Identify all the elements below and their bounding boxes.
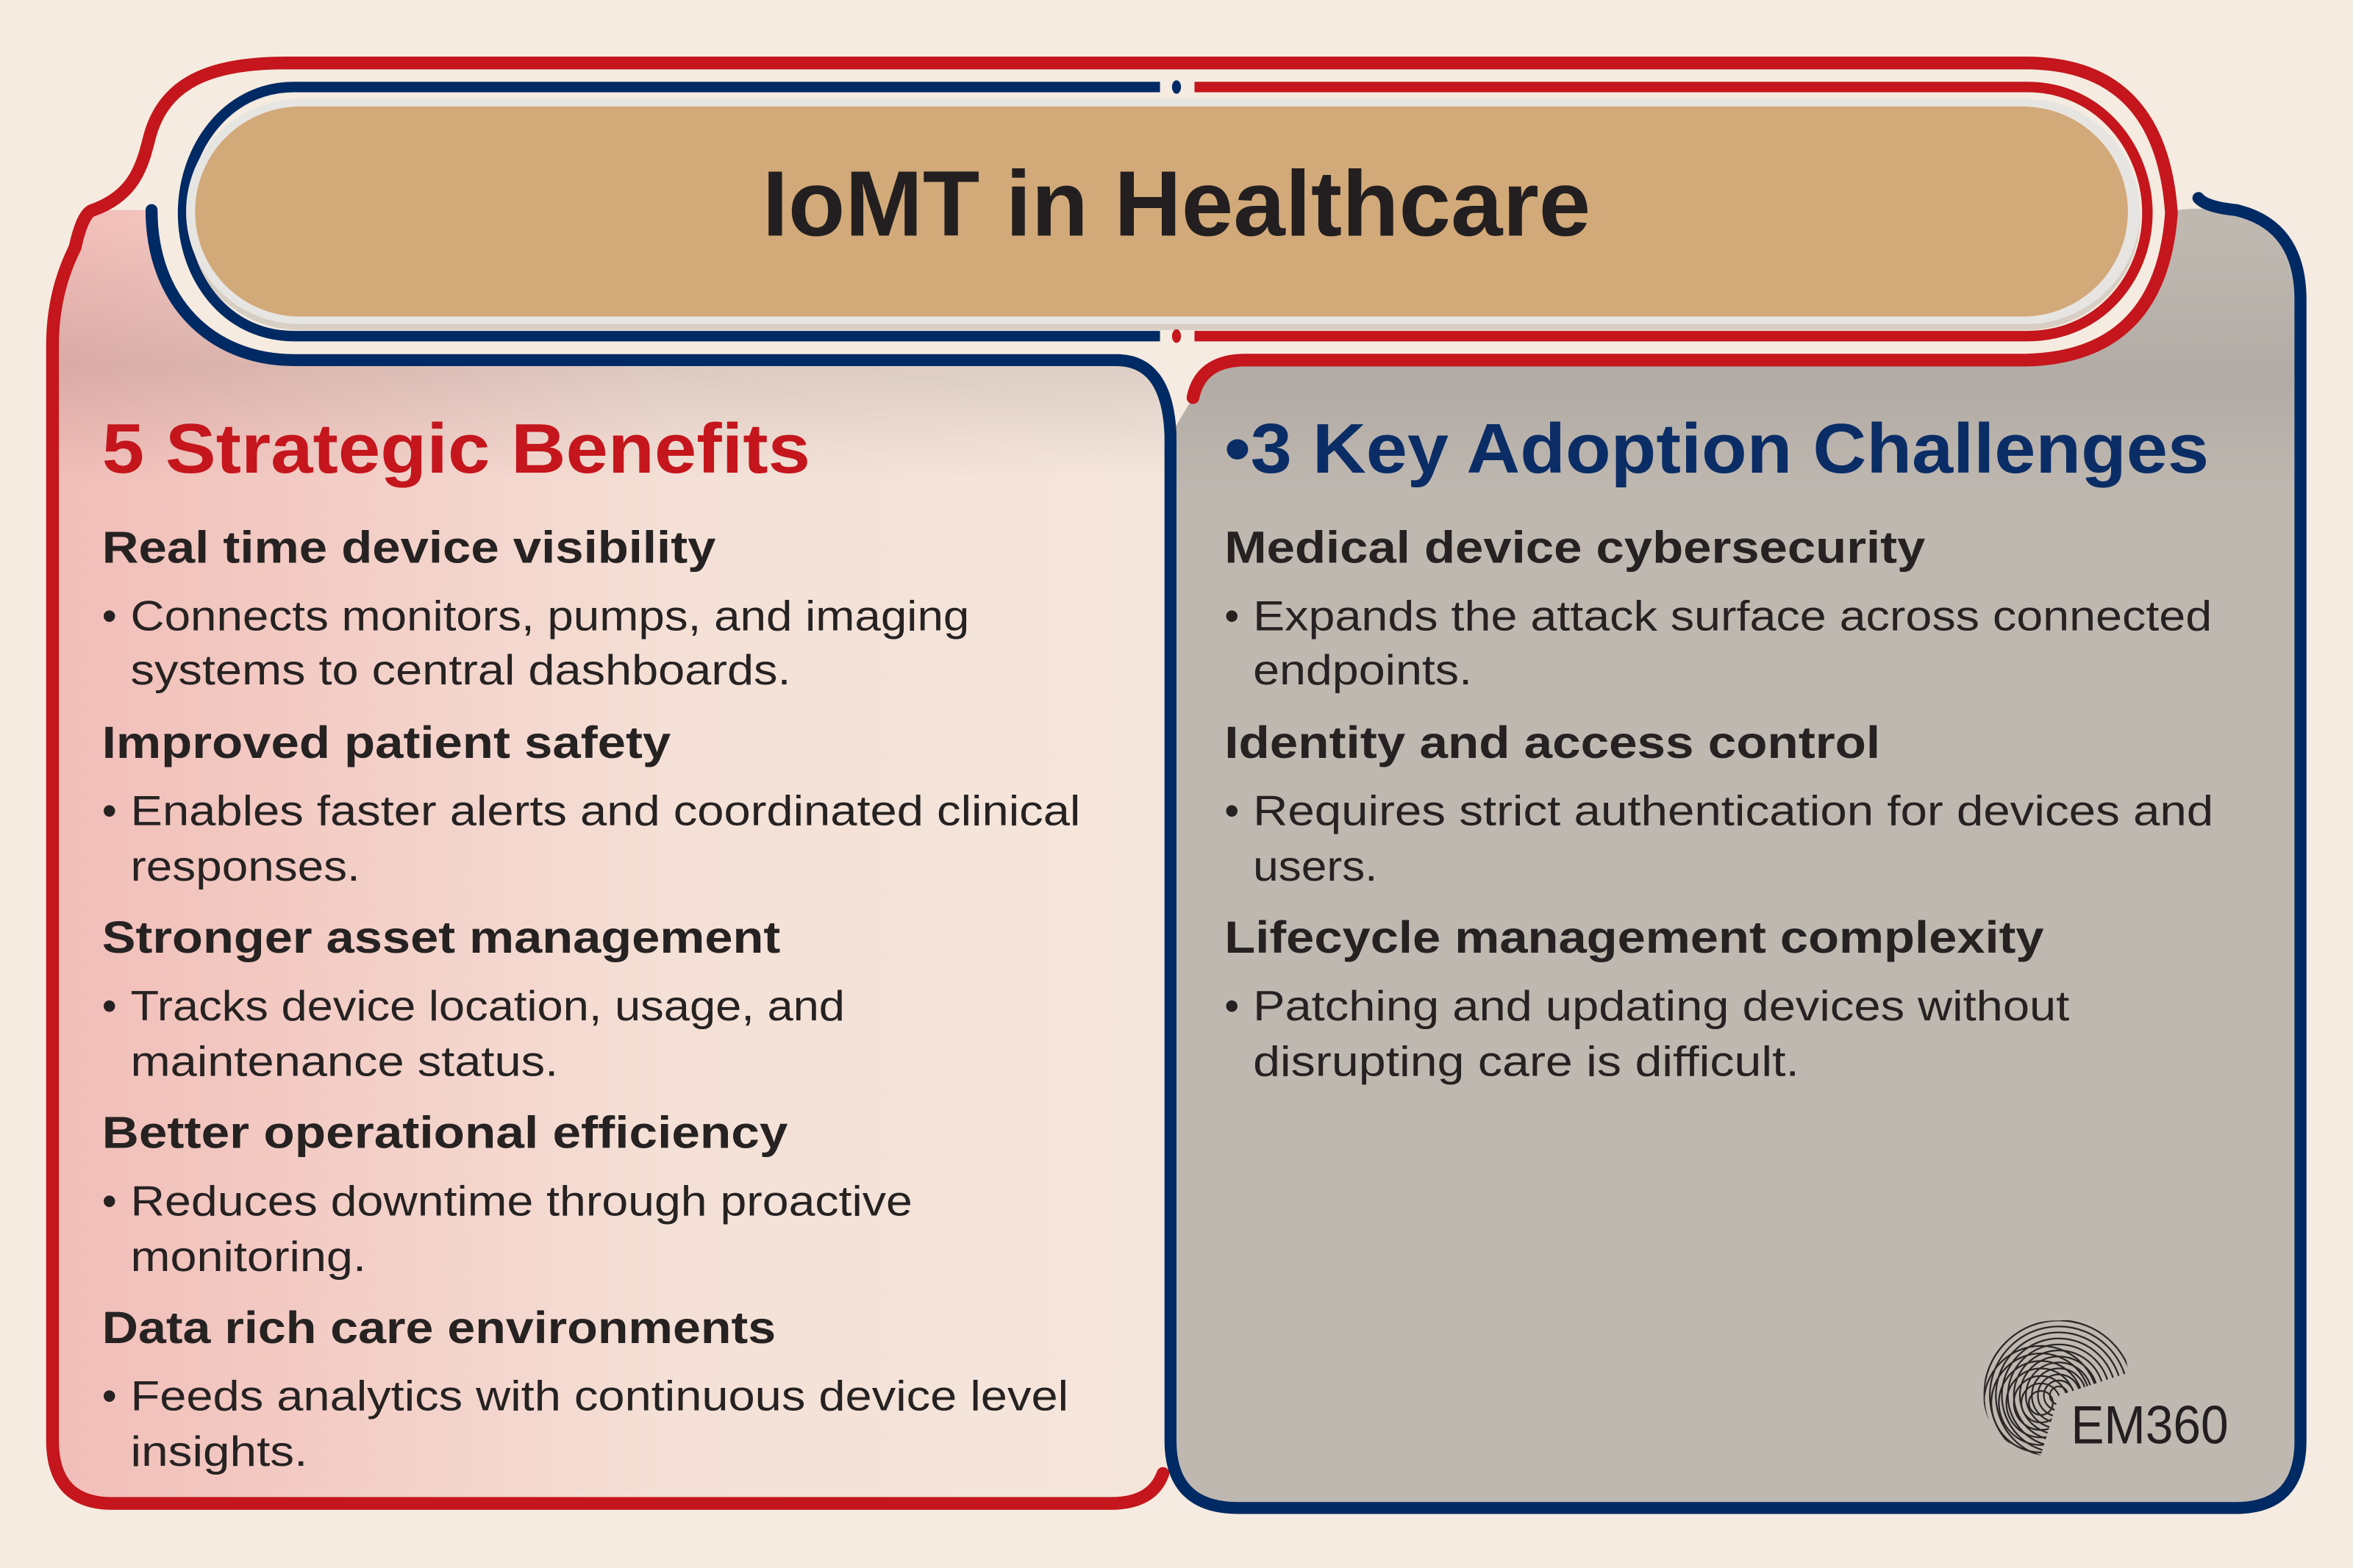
item: improved patient safety: Enables faster alerts and coordinated clinical bbox=[131, 788, 1080, 835]
logo: EM360: EM360 bbox=[2071, 1395, 2229, 1456]
item: data rich care environments: • bbox=[102, 1373, 117, 1420]
item: identity and access control: Identity and access control bbox=[1224, 717, 1880, 767]
item: medical device cybersecurity bbox=[1224, 522, 2212, 694]
item: data rich care environments bbox=[102, 1303, 1068, 1475]
item: stronger asset management: maintenance status. bbox=[131, 1038, 558, 1086]
item: real time device visibility: Connects monitors, pumps, and imaging bbox=[131, 593, 969, 640]
logo: EM360 bbox=[1984, 1320, 2227, 1456]
item: real time device visibility: Real time device visibility bbox=[102, 522, 715, 572]
heading: challenges: •3 Key Adoption Challenges bbox=[1224, 409, 2209, 488]
item: stronger asset management: • bbox=[102, 983, 117, 1030]
item: medical device cybersecurity: Medical device cybersecurity bbox=[1224, 522, 1925, 572]
item: medical device cybersecurity: endpoints. bbox=[1253, 647, 1472, 694]
outline: navy frame bbox=[151, 198, 2301, 1508]
item: identity and access control: Requires strict authentication for devices and bbox=[1253, 788, 2213, 835]
item: identity and access control bbox=[1224, 717, 2213, 890]
item: stronger asset management: Stronger asset management bbox=[102, 912, 780, 962]
item: better operational efficiency: monitoring. bbox=[131, 1234, 366, 1281]
item: improved patient safety: • bbox=[102, 788, 117, 835]
item: data rich care environments: Feeds analytics with continuous device level bbox=[131, 1373, 1068, 1420]
item: identity and access control: • bbox=[1224, 788, 1239, 835]
item: data rich care environments: Data rich care environments bbox=[102, 1303, 776, 1353]
item: better operational efficiency bbox=[102, 1107, 913, 1281]
item: lifecycle management complexity: Lifecycle management complexity bbox=[1224, 912, 2044, 962]
item: lifecycle management complexity bbox=[1224, 912, 2069, 1086]
panel: benefits bbox=[45, 210, 1185, 1503]
item: medical device cybersecurity: Expands the attack surface across connected bbox=[1253, 593, 2212, 640]
item: better operational efficiency: • bbox=[102, 1178, 117, 1225]
item: real time device visibility bbox=[102, 522, 969, 694]
title: IoMT in Healthcare bbox=[763, 151, 1590, 255]
item: real time device visibility: systems to central dashboards. bbox=[131, 647, 791, 694]
item: stronger asset management: Tracks device location, usage, and bbox=[131, 983, 845, 1030]
item: lifecycle management complexity: • bbox=[1224, 983, 1239, 1030]
item: better operational efficiency: Better operational efficiency bbox=[102, 1107, 788, 1157]
heading: benefits: 5 Strategic Benefits bbox=[102, 409, 810, 488]
item: stronger asset management bbox=[102, 912, 845, 1086]
item: improved patient safety bbox=[102, 717, 1080, 890]
item: identity and access control: users. bbox=[1253, 843, 1377, 890]
item: better operational efficiency: Reduces downtime through proactive bbox=[131, 1178, 913, 1225]
panel: challenges bbox=[1171, 209, 2311, 1508]
title banner bbox=[183, 80, 2147, 343]
item: lifecycle management complexity: Patching and updating devices without bbox=[1253, 983, 2069, 1030]
item: medical device cybersecurity: • bbox=[1224, 593, 1239, 640]
item: data rich care environments: insights. bbox=[131, 1428, 307, 1475]
item: real time device visibility: • bbox=[102, 593, 117, 640]
item: improved patient safety: Improved patient safety bbox=[102, 717, 671, 767]
item: lifecycle management complexity: disrupting care is difficult. bbox=[1253, 1038, 1799, 1086]
item: improved patient safety: responses. bbox=[131, 843, 360, 890]
